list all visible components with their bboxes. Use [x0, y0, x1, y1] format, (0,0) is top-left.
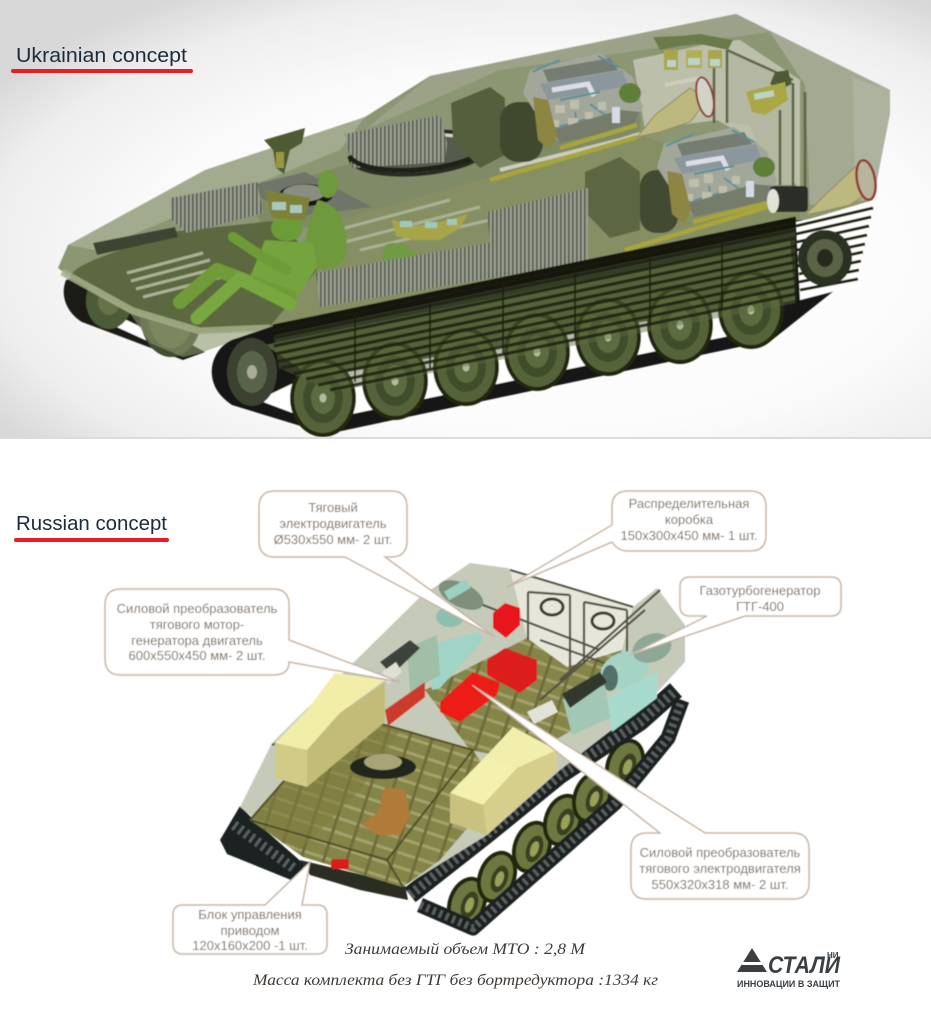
side skirt — [273, 219, 796, 392]
red distribution box — [493, 603, 520, 638]
battery middle — [487, 188, 588, 243]
exhaust two — [805, 159, 878, 215]
battery left — [170, 182, 263, 233]
engine two — [657, 127, 777, 224]
mass note: Масса комплекта без ГТГ без бортредуктора :1334 кг — [252, 972, 658, 989]
rear wall vents — [541, 599, 614, 629]
occupied volume note: Занимаемый объем МТО : 2,8 М — [345, 941, 586, 958]
light floor bars — [500, 78, 700, 170]
front cabin frame — [250, 713, 473, 887]
engine two frame — [625, 203, 767, 250]
callout: motor-generator converter — [105, 589, 400, 682]
callout: gas turbine generator — [630, 577, 841, 655]
callout: distribution box: 150х300х450 мм- 1 шт. — [621, 528, 757, 543]
front idler — [227, 338, 277, 406]
machinery left rear — [434, 574, 488, 627]
callout: traction motor: Тяговый — [308, 500, 358, 515]
engine one — [523, 53, 643, 150]
hull top band — [365, 14, 770, 130]
hull rear right side — [736, 14, 890, 205]
hull rear side lighter face — [853, 78, 890, 200]
callout: traction motor converter: 550х320х318 мм- 2 шт. — [652, 877, 788, 892]
callout: drive control unit: приводом — [220, 923, 280, 938]
callout: distribution box: Распределительная — [629, 496, 749, 511]
commander hatch — [350, 754, 416, 779]
heading: Ukrainian concept — [11, 45, 193, 73]
callout: distribution box: коробка — [665, 512, 714, 527]
callout: gas turbine generator: ГТГ-400 — [736, 599, 784, 614]
drive control block — [331, 859, 349, 869]
Russian vehicle cutaway — [220, 563, 685, 935]
dark red strip — [385, 682, 425, 726]
converter stack left — [380, 640, 420, 684]
side rail — [93, 227, 178, 255]
hull side under skirt — [265, 238, 795, 395]
turret ring front rim — [349, 146, 489, 170]
converter stack right — [527, 672, 607, 724]
logo: Stalь: ИННОВАЦИИ В ЗАЩИТ — [737, 979, 840, 990]
teal block left — [407, 635, 440, 692]
logo: Stalь — [737, 948, 841, 990]
callout: traction motor: электродвигатель — [279, 516, 387, 531]
rear cylinder — [767, 186, 808, 213]
battery near row — [316, 228, 588, 307]
interior mid deck — [250, 100, 640, 235]
left track — [220, 806, 305, 882]
crew member front — [180, 215, 317, 318]
generator two — [585, 157, 678, 238]
teal block right — [563, 685, 610, 735]
callout: motor-generator converter: 600х550х450 мм- 2 шт. — [129, 648, 265, 663]
fuel box left — [275, 673, 385, 787]
periscopes centre — [392, 214, 468, 240]
gas turbine generator right — [595, 628, 676, 695]
callout: motor-generator converter: тягового мотор- — [150, 617, 244, 632]
engine one frame — [490, 125, 637, 180]
exhaust one — [637, 76, 717, 137]
hull underside — [300, 860, 408, 900]
small hatch ring — [279, 184, 333, 206]
panel: Russian concept — [14, 491, 841, 990]
hull shell — [240, 563, 685, 887]
far road wheels — [86, 273, 202, 357]
callout: drive control unit: 120х160х200 -1 шт. — [192, 938, 308, 953]
callout: motor-generator converter: Силовой преобразователь — [117, 601, 278, 616]
callout: traction motor — [259, 491, 495, 637]
callout: drive control unit — [173, 862, 327, 954]
callout: traction motor converter: тягового электродвигателя — [639, 861, 801, 876]
rear wall — [510, 570, 633, 667]
logo: Stalь: НИ — [827, 951, 839, 960]
teal floor left — [430, 632, 483, 690]
generator one — [451, 87, 543, 168]
rear battery bank — [345, 115, 447, 168]
callout: drive control unit: Блок управления — [198, 907, 302, 922]
fuel box right — [450, 727, 557, 835]
rear sprocket — [798, 230, 852, 286]
panel background — [0, 0, 931, 438]
panel bottom edge — [0, 437, 931, 439]
hull rear interior zone — [633, 40, 800, 190]
callout: traction motor converter — [472, 685, 809, 899]
periscopes top — [653, 34, 733, 70]
rear fender — [796, 205, 873, 300]
Ukrainian vehicle cutaway — [58, 14, 890, 437]
duct frame — [714, 50, 805, 187]
heading: Russian concept: Russian concept — [16, 513, 167, 535]
turret ring — [346, 124, 492, 182]
interior floor strip — [273, 135, 800, 330]
floor stripes — [127, 200, 490, 297]
hull front upper glass — [68, 117, 365, 250]
red power converter — [440, 672, 500, 722]
callout: motor-generator converter: генератора двигатель — [131, 633, 263, 648]
far track white gap — [110, 318, 160, 343]
rear floor — [425, 638, 622, 760]
teal base right — [607, 672, 657, 732]
front cabin tint — [250, 713, 400, 850]
road wheels — [290, 271, 784, 437]
near track — [212, 220, 843, 434]
roof hatch plate — [240, 172, 372, 216]
logo: Stalь: СТАЛИ — [768, 952, 841, 979]
right track upper run — [410, 690, 676, 895]
dark floor under nose — [70, 220, 317, 333]
panel: Ukrainian concept — [0, 0, 931, 439]
pale nose band — [62, 272, 270, 331]
hull shell — [58, 14, 890, 333]
crew member rear — [306, 170, 347, 269]
crew seat — [362, 787, 410, 835]
track white gap — [258, 300, 772, 424]
callout: distribution box — [507, 491, 766, 587]
callout: traction motor: Ø530х550 мм- 2 шт. — [274, 532, 392, 547]
far track — [64, 270, 205, 360]
front cabin floor — [250, 713, 500, 887]
rear wall frames — [470, 570, 660, 700]
callout: gas turbine generator: Газотурбогенератор — [699, 583, 821, 598]
road wheels — [440, 733, 652, 935]
right track lower run — [420, 700, 682, 928]
periscopes right — [746, 70, 792, 115]
periscope on roof — [264, 128, 305, 174]
red traction motor — [487, 648, 537, 693]
heading: Ukrainian concept: Ukrainian concept — [16, 45, 187, 67]
callout: traction motor converter: Силовой преобразователь — [640, 845, 801, 860]
periscopes hatch — [265, 190, 310, 220]
hull translucent lower nose — [70, 277, 273, 357]
crew member third — [375, 243, 425, 295]
duct wall — [727, 50, 793, 185]
